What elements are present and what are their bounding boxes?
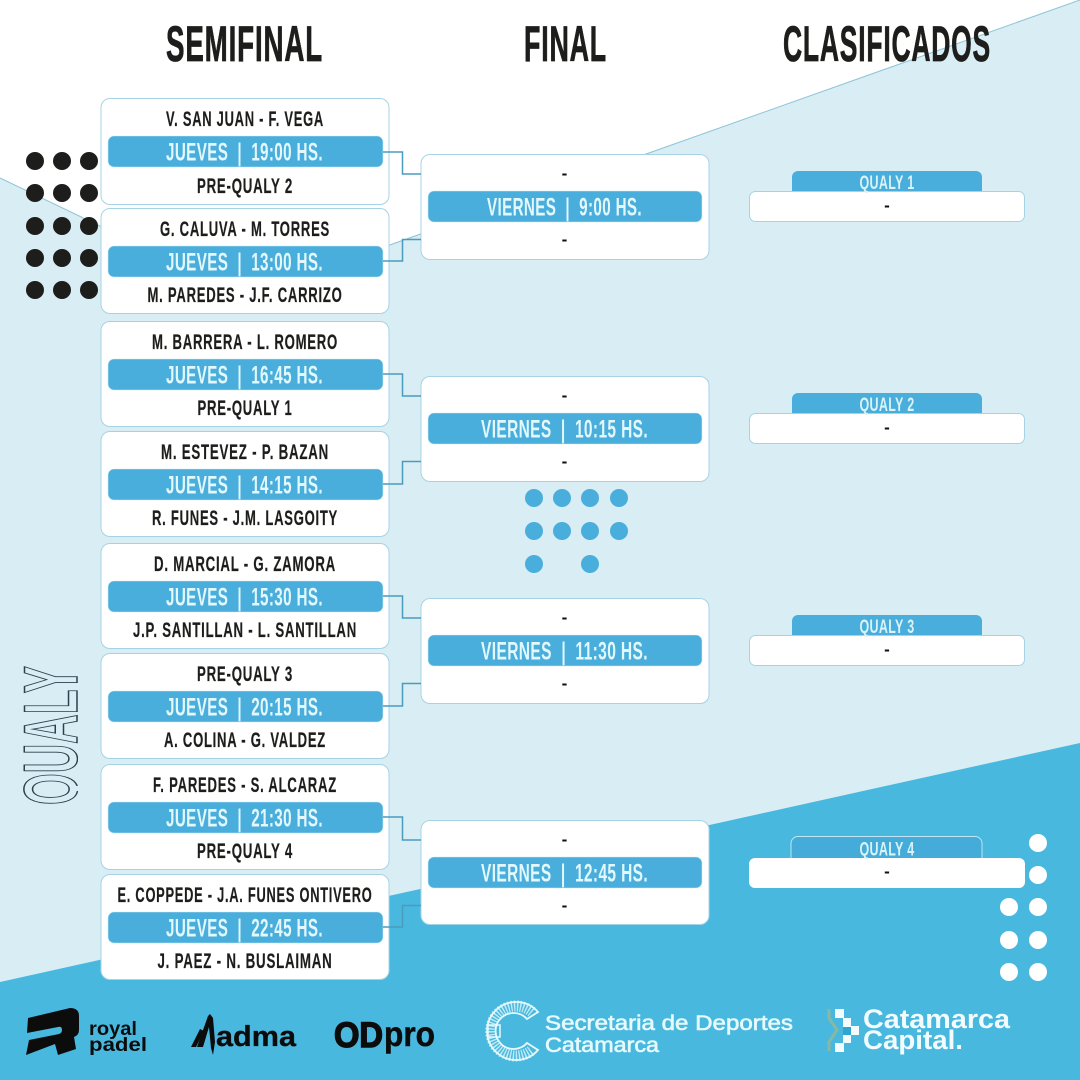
qualifier 4: -: [884, 862, 890, 881]
final card 3: -: [562, 608, 567, 627]
heading: semifinal: SEMIFINAL: [166, 16, 323, 72]
final card 4: [421, 820, 709, 924]
match card 8: [101, 874, 389, 980]
match card 4: JUEVES | 14:15 HS.: [166, 472, 323, 500]
final card 1: VIERNES | 9:00 HS.: [487, 194, 642, 222]
final card 2: [421, 376, 709, 482]
footer logos: [26, 1002, 1011, 1060]
match card 7: JUEVES | 21:30 HS.: [166, 804, 323, 832]
match card 6: PRE-QUALY 3: [197, 663, 293, 686]
qualifier 2: QUALY 2: [860, 394, 914, 416]
panel: semifinal matches: [101, 98, 389, 980]
qualifier 2: [750, 393, 1024, 444]
final card 3: [421, 598, 709, 704]
logo: secretaria de deportes: Secretaria de Deportes: [545, 1012, 793, 1035]
match card 5: [101, 544, 389, 648]
match card 2: M. PAREDES - J.F. CARRIZO: [148, 284, 342, 307]
match card 2: JUEVES | 13:00 HS.: [166, 248, 323, 276]
logo: madma: adma: [216, 1021, 297, 1053]
logo: odpro: [334, 1015, 435, 1055]
logo: odpro: OD: [334, 1016, 383, 1055]
logo: royal padel: [26, 1008, 147, 1056]
qualifier 3: -: [884, 640, 890, 659]
match card 4: [101, 432, 389, 536]
final card 4: VIERNES | 12:45 HS.: [481, 860, 648, 888]
match card 3: [101, 322, 389, 426]
match card 8: J. PAEZ - N. BUSLAIMAN: [158, 950, 332, 973]
qualifier 4: QUALY 4: [860, 838, 914, 860]
match card 4: M. ESTEVEZ - P. BAZAN: [161, 441, 329, 464]
match card 4: R. FUNES - J.M. LASGOITY: [152, 507, 338, 530]
match card 2: [101, 208, 389, 314]
match card 5: D. MARCIAL - G. ZAMORA: [154, 553, 336, 576]
match card 3: PRE-QUALY 1: [198, 397, 292, 420]
match card 3: JUEVES | 16:45 HS.: [166, 362, 323, 390]
final card 2: -: [562, 386, 567, 405]
logo: catamarca capital: Catamarca: [863, 1004, 1011, 1034]
match card 1: JUEVES | 19:00 HS.: [166, 138, 323, 166]
match card 6: JUEVES | 20:15 HS.: [166, 694, 323, 722]
match card 1: [101, 98, 389, 204]
qualifier 2: -: [884, 418, 890, 437]
match card 8: JUEVES | 22:45 HS.: [166, 914, 323, 942]
side label: qualy outlined vertical text: QUALY: [9, 666, 94, 805]
match card 1: V. SAN JUAN - F. VEGA: [166, 108, 324, 131]
match card 7: F. PAREDES - S. ALCARAZ: [153, 774, 337, 797]
match card 1: PRE-QUALY 2: [197, 175, 293, 198]
logo: royal padel: padel: [89, 1034, 147, 1056]
match card 5: J.P. SANTILLAN - L. SANTILLAN: [133, 619, 357, 642]
logo: catamarca capital: [829, 1004, 1011, 1055]
black dot grid: [26, 152, 98, 299]
logo: secretaria de deportes: Catamarca: [545, 1034, 659, 1057]
match card 5: JUEVES | 15:30 HS.: [166, 584, 323, 612]
qualifier 3: [750, 615, 1024, 666]
white dot grid: [1000, 834, 1047, 981]
panel: clasificados: [749, 171, 1025, 888]
logo: secretaria de deportes: [487, 1002, 793, 1060]
final card 2: -: [562, 452, 567, 471]
match card 8: E. COPPEDE - J.A. FUNES ONTIVERO: [118, 884, 372, 907]
match card 3: M. BARRERA - L. ROMERO: [152, 331, 338, 354]
final card 3: -: [562, 674, 567, 693]
logo: royal padel: royal: [89, 1018, 137, 1040]
logo: madma: [191, 1014, 297, 1055]
qualifier 1: -: [884, 196, 890, 215]
panel: final matches: [421, 154, 709, 924]
match card 7: PRE-QUALY 4: [197, 840, 293, 863]
blue dot grid: [525, 489, 628, 573]
final card 2: VIERNES | 10:15 HS.: [481, 416, 648, 444]
qualifier 3: QUALY 3: [860, 616, 914, 638]
final card 3: VIERNES | 11:30 HS.: [481, 638, 648, 666]
match card 6: [101, 654, 389, 758]
final card 1: -: [562, 230, 567, 249]
final card 4: -: [562, 896, 567, 915]
bracket connectors: [383, 152, 421, 927]
match card 6: A. COLINA - G. VALDEZ: [164, 729, 326, 752]
match card 2: G. CALUVA - M. TORRES: [160, 218, 330, 241]
qualifier 1: [750, 171, 1024, 222]
final card 4: -: [562, 830, 567, 849]
match card 7: [101, 764, 389, 870]
qualifier 1: QUALY 1: [860, 172, 914, 194]
final card 1: [421, 154, 709, 260]
heading: final: FINAL: [524, 16, 607, 72]
logo: odpro: pro: [384, 1015, 435, 1054]
background: bright blue lower wedge: [0, 743, 1080, 1080]
logo: catamarca capital: Capital.: [863, 1025, 963, 1055]
qualifier 4: [749, 836, 1025, 888]
final card 1: -: [562, 164, 567, 183]
